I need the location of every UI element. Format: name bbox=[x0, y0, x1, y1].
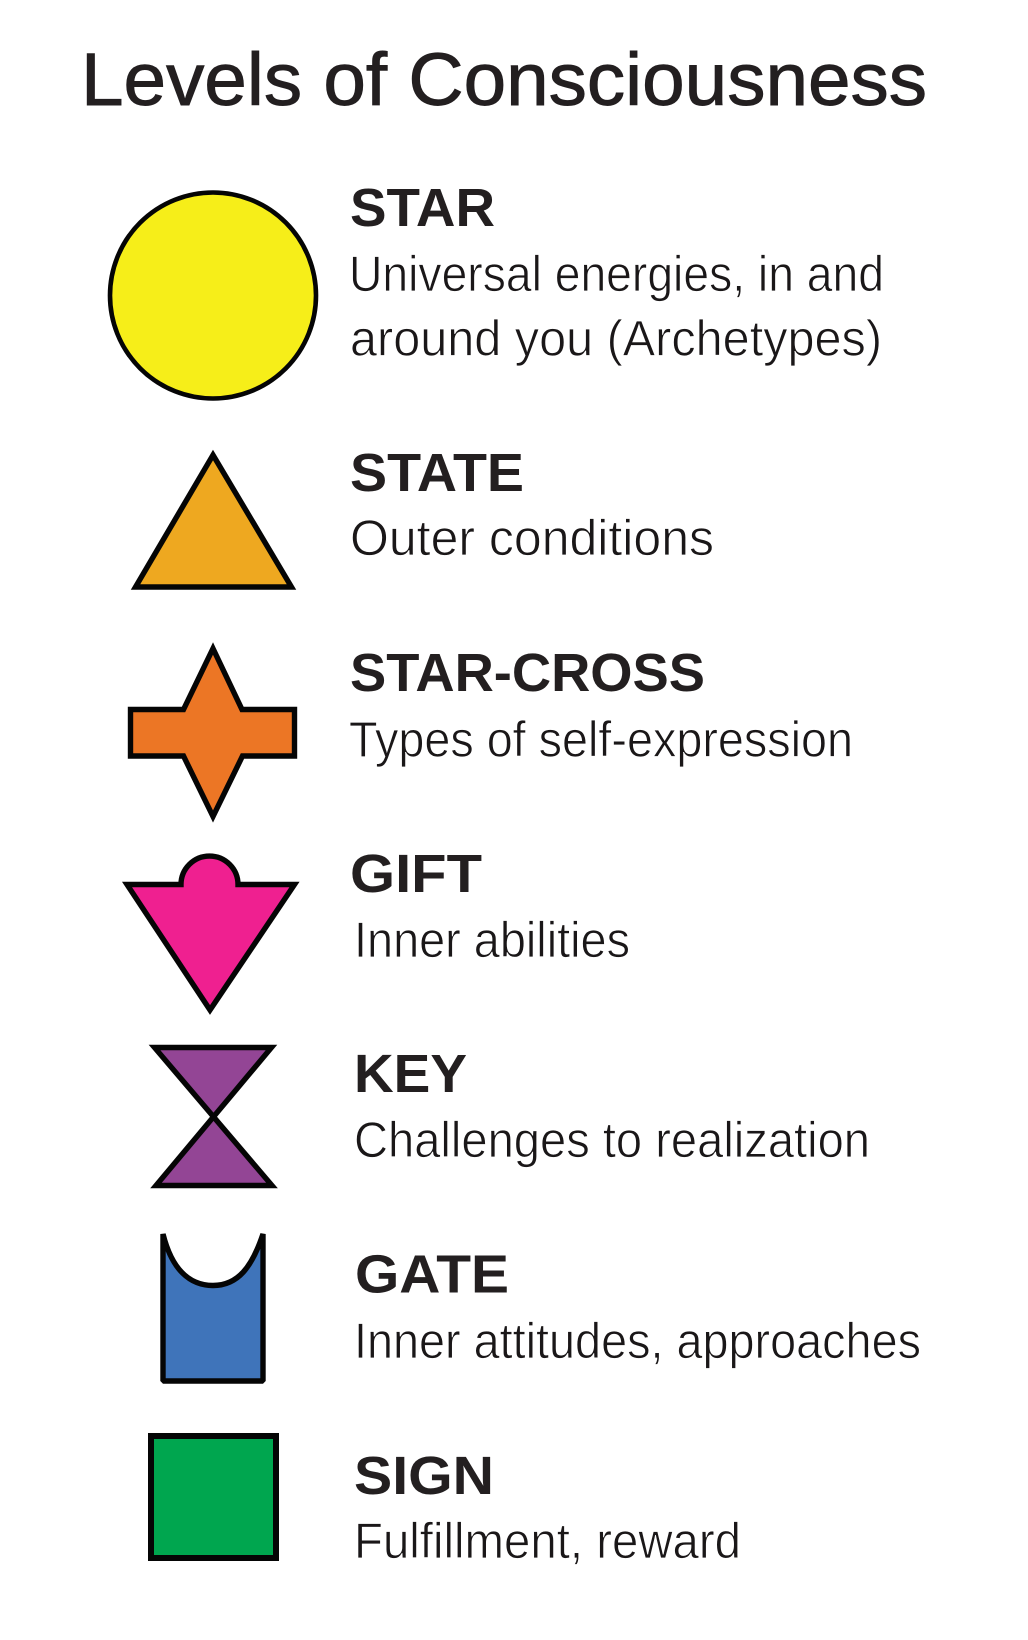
description: gate: Inner attitudes, approaches bbox=[354, 1313, 921, 1369]
row: gate bbox=[163, 1234, 921, 1381]
description: star: around you (Archetypes) bbox=[350, 310, 882, 366]
icon: orange star-cross bbox=[130, 648, 294, 816]
heading: GIFT: GIFT bbox=[350, 844, 482, 904]
description: star: Universal energies, in and bbox=[349, 246, 884, 302]
row: sign bbox=[151, 1436, 741, 1569]
description: gift: Inner abilities bbox=[354, 912, 630, 968]
icon: purple hourglass bbox=[154, 1048, 272, 1186]
heading: GATE: GATE bbox=[355, 1244, 509, 1304]
heading: STATE: STATE bbox=[350, 443, 524, 503]
icon: yellow circle bbox=[110, 192, 316, 398]
icon: amber triangle bbox=[136, 455, 292, 587]
row: key bbox=[154, 1044, 870, 1186]
heading: STAR: STAR bbox=[350, 178, 495, 238]
row: gift bbox=[127, 844, 630, 1010]
heading: KEY: KEY bbox=[354, 1044, 467, 1104]
row: state bbox=[136, 443, 714, 587]
title: Levels of Consciousness bbox=[81, 38, 927, 121]
description: star-cross: Types of self-expression bbox=[349, 712, 853, 768]
heading: SIGN: SIGN bbox=[354, 1446, 494, 1506]
description: key: Challenges to realization bbox=[354, 1112, 870, 1168]
description: sign: Fulfillment, reward bbox=[354, 1513, 741, 1569]
icon: pink gift triangle with dome bbox=[127, 856, 294, 1010]
row: star-cross bbox=[130, 643, 853, 816]
heading: STAR-CROSS: STAR-CROSS bbox=[350, 643, 705, 703]
description: star bbox=[349, 246, 884, 366]
icon: green square bbox=[151, 1436, 276, 1558]
icon: blue gate bbox=[163, 1234, 263, 1381]
row: star bbox=[110, 178, 884, 398]
description: state: Outer conditions bbox=[350, 510, 714, 566]
